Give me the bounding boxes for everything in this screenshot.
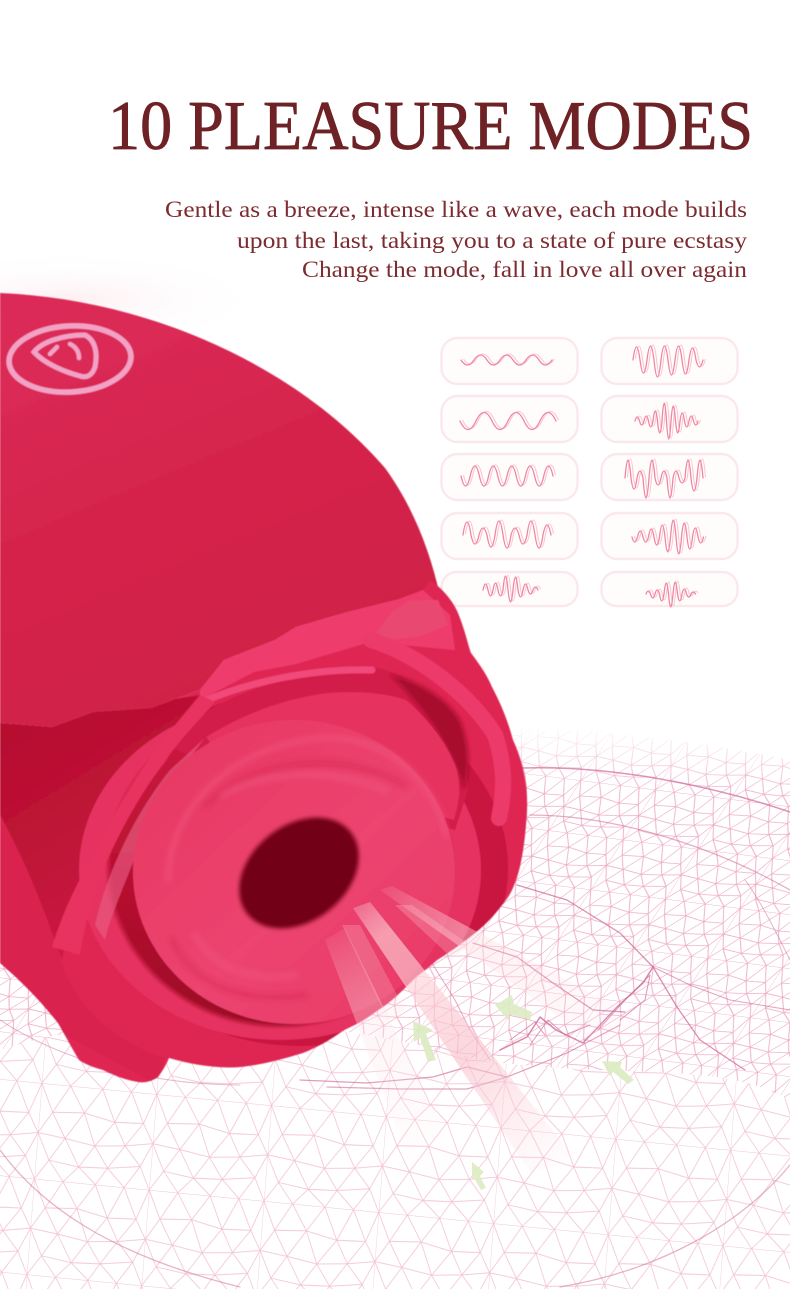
description text: upon the last, taking you to a state of pure ecstasy (237, 228, 748, 253)
description text: Change the mode, fall in love all over again (302, 257, 748, 282)
dark pocket upper right (390, 674, 468, 790)
suction opening (236, 814, 362, 932)
bright ring line (200, 670, 372, 703)
dark pocket right (208, 704, 508, 1046)
description text (165, 197, 748, 282)
wrap ring (79, 700, 481, 1040)
rounded upper body (0, 293, 440, 727)
band facet (378, 600, 448, 639)
second petal (206, 692, 459, 820)
product (0, 293, 540, 1090)
inner dark gap (106, 748, 341, 1028)
upper crescent petal (165, 668, 468, 830)
description text: Gentle as a breeze, intense like a wave, each mode builds (165, 197, 747, 222)
vibration mode buttons (442, 338, 738, 607)
dark left petal (0, 695, 200, 960)
green arrows (413, 995, 634, 1190)
central disk (133, 720, 455, 1024)
mesh ridge lines (0, 768, 790, 1287)
top outer band (200, 590, 455, 700)
waveform lines, light layer (462, 345, 706, 606)
left lower petal (0, 815, 165, 1085)
outer right petal (371, 640, 503, 818)
button ring logo (7, 323, 133, 395)
disk grooves (168, 738, 447, 997)
pale inner stripe (95, 738, 205, 940)
flower head (0, 575, 540, 1090)
air flow rays (325, 886, 660, 1190)
left bright stripe (52, 695, 215, 955)
wireframe mesh surface (0, 728, 790, 1289)
waveform lines, main layer (460, 346, 704, 607)
